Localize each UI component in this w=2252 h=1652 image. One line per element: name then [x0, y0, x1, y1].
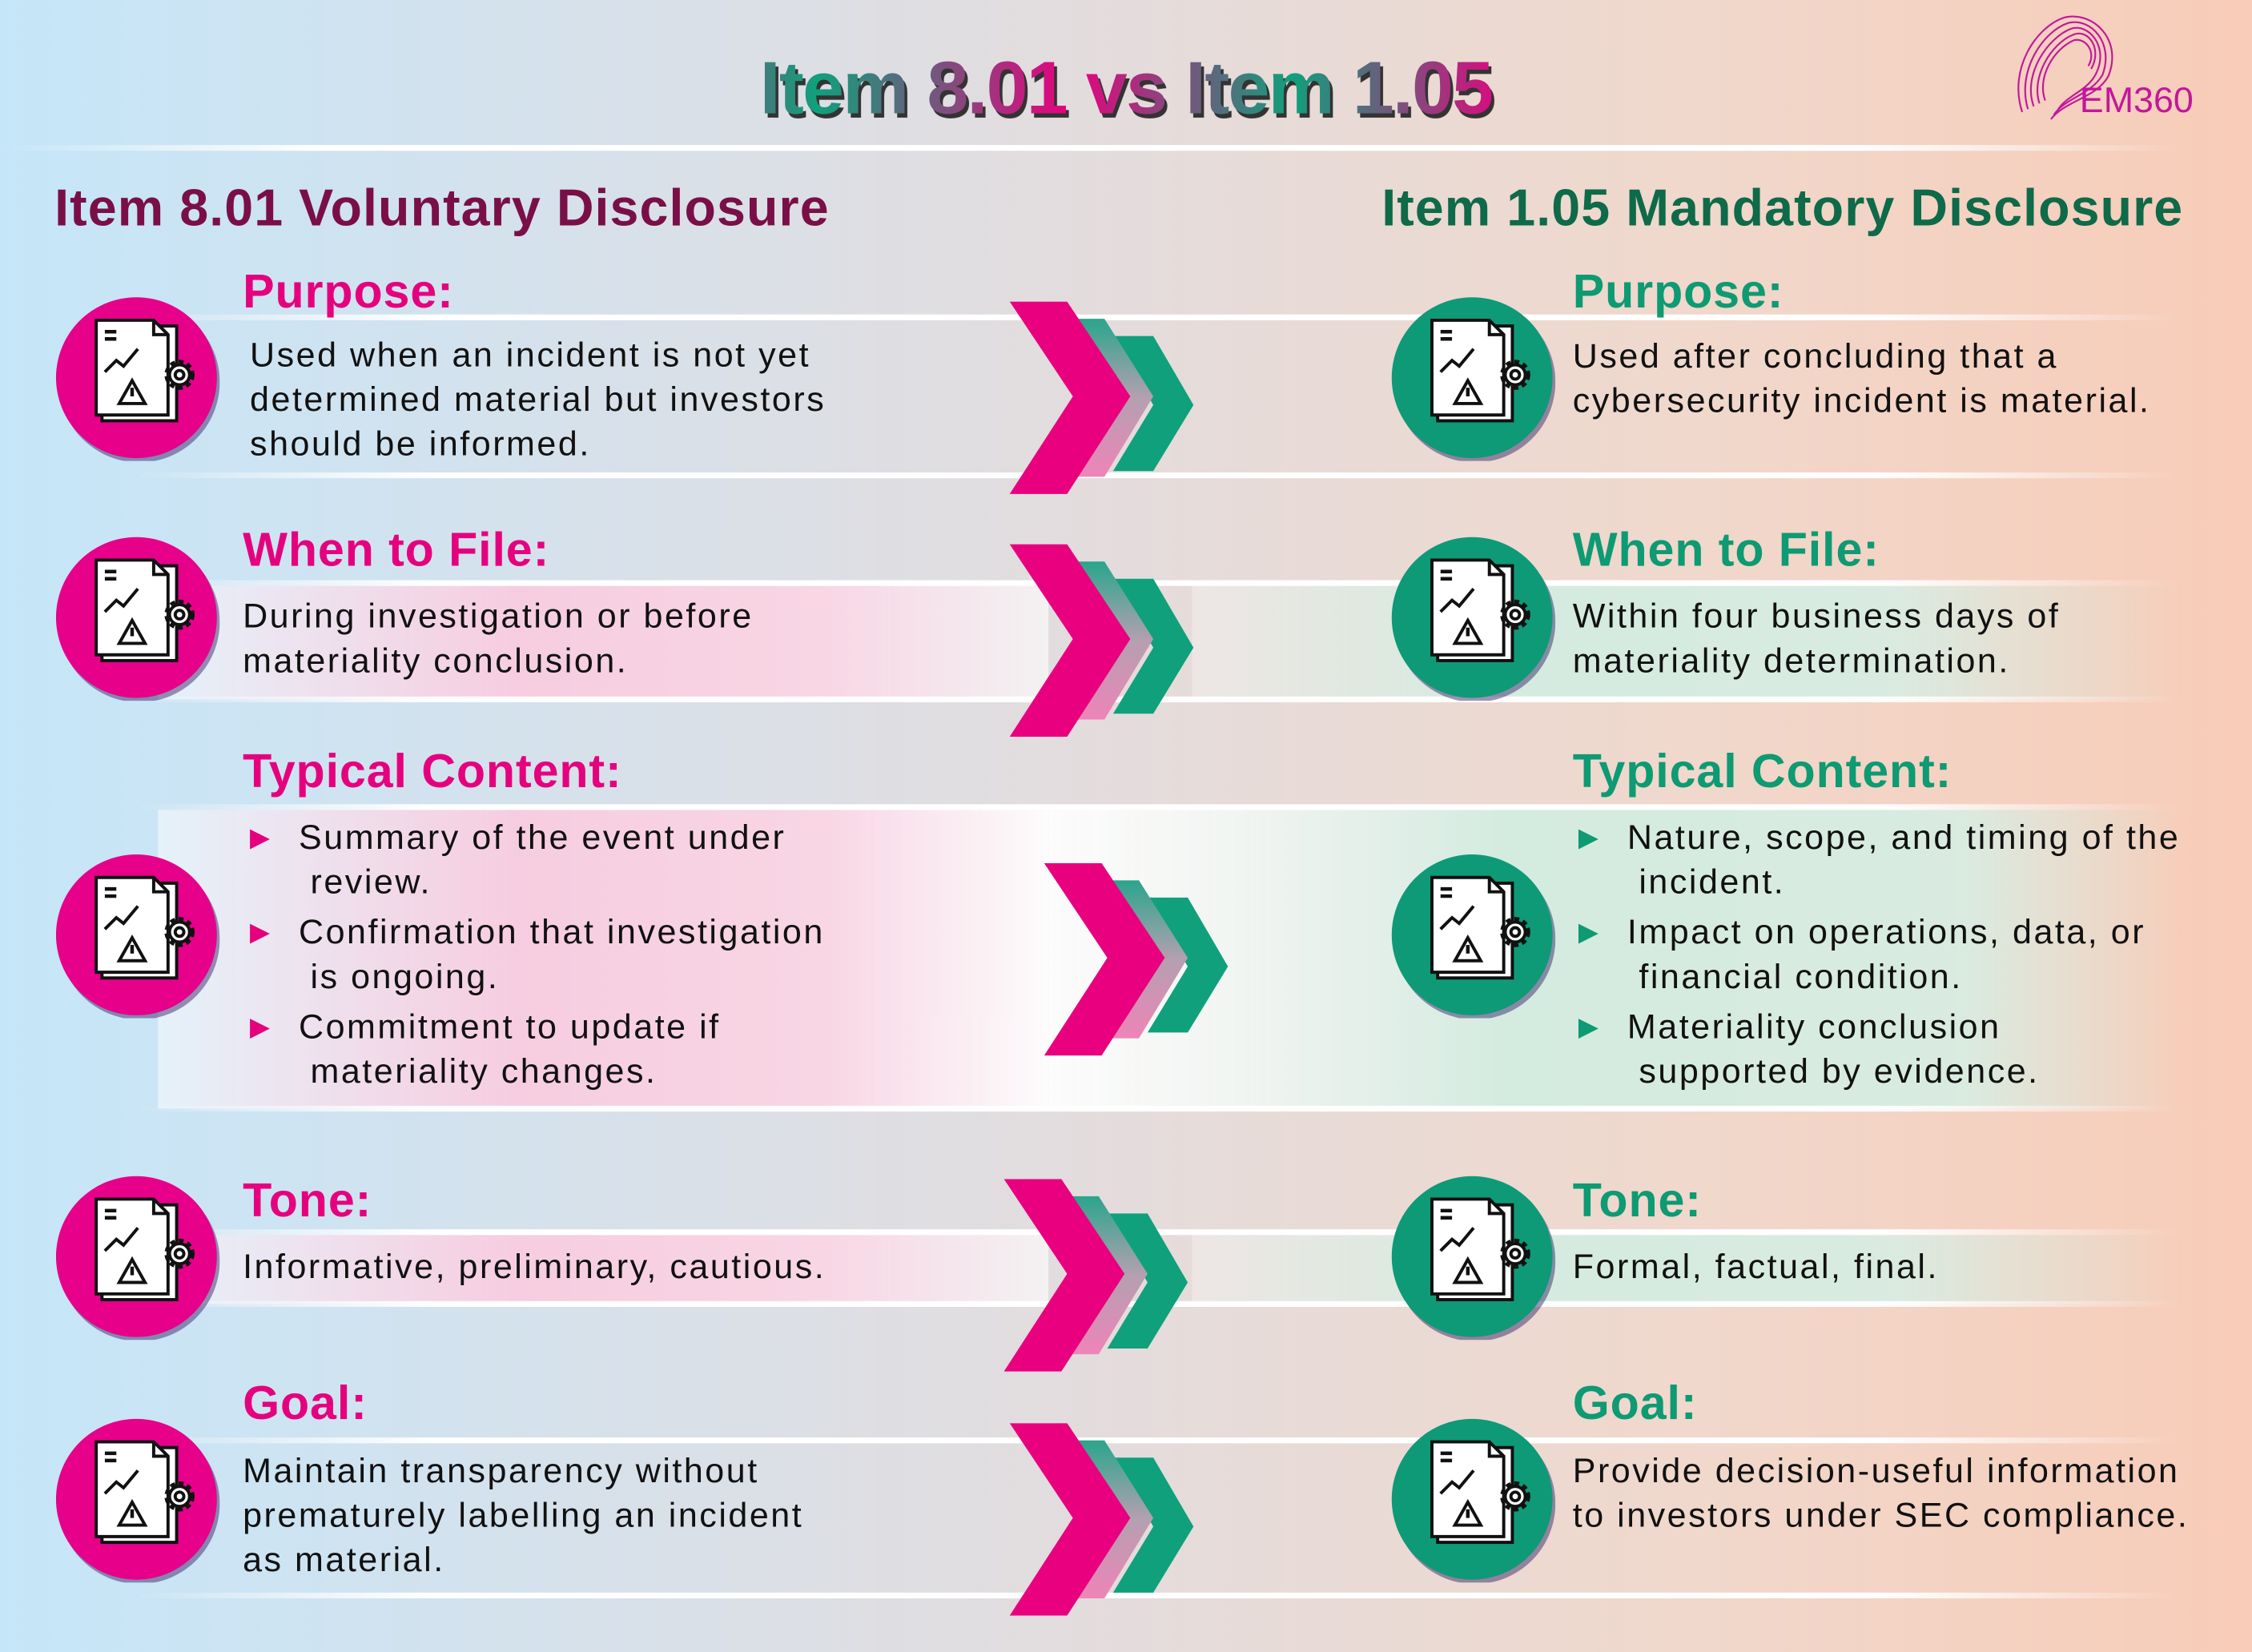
heading: left column: Item 8.01 Voluntary Disclosure: [54, 178, 830, 237]
text: Used after concluding that a: [1573, 337, 2058, 376]
row 2 when: left: [56, 523, 754, 701]
bullet list: financial condition.: [1639, 958, 1963, 997]
arrow: chevrons row 1: [1009, 301, 1193, 494]
bullet list: [1578, 818, 2180, 1091]
text: prematurely labelling an incident: [243, 1497, 803, 1535]
row 4 tone: left: [56, 1173, 826, 1340]
arrow: chevrons row 4: [1004, 1179, 1191, 1374]
label: Typical Content:: [1573, 744, 1952, 797]
row 4 tone: right: [1392, 1173, 1939, 1340]
bullet list: Materiality conclusion: [1627, 1008, 2001, 1047]
row 3 typical: left: ▶: [250, 823, 270, 851]
logo: EM360: EM360: [2080, 79, 2194, 120]
bullet list: materiality changes.: [310, 1053, 657, 1091]
title: Item 8.01 vs Item 1.05: [760, 47, 1492, 131]
text: [243, 597, 754, 681]
row 1 purpose: right: [1392, 264, 2151, 461]
label: Tone:: [1573, 1173, 1702, 1227]
text: Provide decision-useful information: [1573, 1452, 2179, 1491]
arrow: chevrons row 3: [1044, 863, 1229, 1055]
text: Formal, factual, final.: [1573, 1248, 1939, 1287]
row 3 typical: right: [1392, 744, 2180, 1091]
text: During investigation or before: [243, 597, 754, 636]
arrow: chevrons row 5: [1010, 1423, 1196, 1618]
text: [250, 336, 826, 464]
label: Goal:: [243, 1376, 368, 1429]
text: Within four business days of: [1573, 597, 2060, 636]
icon: [1392, 1419, 1555, 1582]
bullet list: supported by evidence.: [1639, 1053, 2040, 1091]
text: materiality conclusion.: [243, 642, 628, 681]
icon: [1392, 854, 1555, 1019]
row 2 when: right: [1392, 523, 2060, 701]
text: materiality determination.: [1573, 642, 2010, 681]
row 3 typical: left: ▶: [250, 1012, 270, 1041]
icon: [56, 1176, 219, 1340]
text: [1573, 597, 2060, 681]
arrow: chevrons row 2: [1009, 545, 1193, 737]
row 3 typical: right: ▶: [1578, 1012, 1599, 1041]
logo: EM360: [2017, 16, 2194, 120]
row 5 goal: left: [56, 1376, 803, 1582]
text: as material.: [243, 1541, 445, 1580]
icon: [1392, 537, 1555, 701]
row 1 purpose: left: [56, 264, 826, 464]
icon: [56, 1419, 219, 1582]
text: [243, 1452, 803, 1580]
text: Informative, preliminary, cautious.: [243, 1248, 826, 1287]
row 3 typical: left: ▶: [250, 918, 270, 947]
text: cybersecurity incident is material.: [1573, 382, 2151, 420]
row 3 typical: right: ▶: [1578, 823, 1599, 851]
text: determined material but investors: [250, 380, 826, 420]
heading: right column: Item 1.05 Mandatory Disclosure: [1381, 178, 2183, 237]
bullet list: Commitment to update if: [299, 1008, 721, 1047]
bullet list: incident.: [1639, 863, 1785, 902]
bullet list: review.: [310, 863, 432, 902]
text: to investors under SEC compliance.: [1573, 1497, 2189, 1535]
label: Tone:: [243, 1173, 372, 1227]
title: [574, 43, 1678, 135]
icon: [1392, 1176, 1555, 1340]
label: When to File:: [1573, 523, 1880, 576]
bullet list: Summary of the event under: [299, 818, 786, 858]
icon: document green: [1392, 297, 1555, 461]
text: Maintain transparency without: [243, 1452, 759, 1491]
label: Purpose:: [243, 264, 454, 317]
text: should be informed.: [250, 425, 591, 464]
divider: [0, 145, 2183, 151]
row 3 typical: left: [56, 744, 825, 1091]
text: [1573, 337, 2151, 420]
bullet list: Nature, scope, and timing of the: [1627, 818, 2180, 858]
text: Used when an incident is not yet: [250, 336, 810, 375]
icon: [56, 854, 219, 1019]
lines: [129, 315, 2183, 320]
row 3 typical: right: ▶: [1578, 918, 1599, 947]
bullet list: [250, 818, 825, 1091]
label: Typical Content:: [243, 744, 622, 797]
icon: document pink: [56, 297, 219, 461]
label: When to File:: [243, 523, 549, 576]
row 5 goal: right: [1392, 1376, 2189, 1582]
bullet list: Confirmation that investigation: [299, 914, 825, 952]
bullet list: is ongoing.: [310, 958, 499, 997]
label: Goal:: [1573, 1376, 1697, 1429]
bands: [158, 586, 1048, 699]
bullet list: Impact on operations, data, or: [1627, 914, 2145, 952]
icon: [56, 537, 219, 701]
label: Purpose:: [1573, 264, 1784, 317]
text: [1573, 1452, 2189, 1535]
